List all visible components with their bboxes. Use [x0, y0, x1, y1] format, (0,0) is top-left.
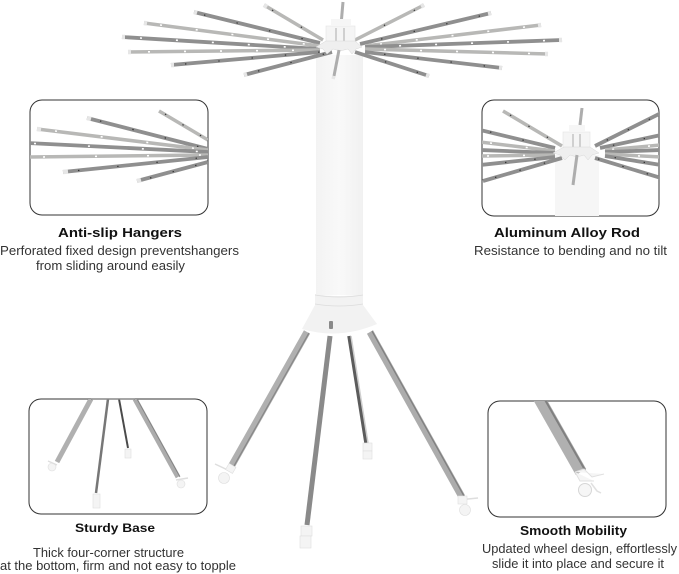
text: anti-slip description	[0, 243, 239, 273]
panel frame	[482, 100, 659, 216]
panel: anti-slip hangers	[28, 100, 208, 215]
right rods	[355, 5, 562, 76]
wheel close-up	[539, 398, 604, 496]
heading: aluminum alloy rod: Aluminum Alloy Rod	[494, 225, 640, 240]
rod hub close-up	[480, 108, 661, 216]
panel frame	[29, 399, 207, 514]
heading: sturdy base: Sturdy Base	[75, 521, 155, 535]
column	[316, 55, 363, 295]
heading: smooth mobility: Smooth Mobility	[520, 523, 628, 538]
casters	[215, 443, 478, 548]
text: sturdy base description: at the bottom, firm and not easy to topple	[0, 558, 236, 573]
hanger rods close-up	[28, 111, 208, 181]
text: smooth mobility description: slide it into place and secure it	[492, 556, 664, 571]
base legs close-up	[48, 399, 188, 508]
panel: smooth mobility	[488, 398, 666, 517]
panel: sturdy base	[29, 399, 207, 514]
legs	[232, 331, 464, 525]
panel frame	[30, 100, 208, 215]
main product: hanger stand	[122, 2, 562, 548]
heading: anti-slip hangers: Anti-slip Hangers	[58, 225, 182, 240]
base collar and flare	[302, 294, 377, 333]
text: sturdy base description: Thick four-corner structure	[33, 545, 184, 560]
text: anti-slip description: Perforated fixed design preventshangers	[0, 243, 239, 258]
text: aluminum alloy description: Resistance to bending and no tilt	[474, 243, 667, 258]
panel: aluminum alloy rod	[480, 100, 661, 216]
left rods	[122, 5, 332, 75]
text: smooth mobility description: Updated wheel design, effortlessly	[482, 541, 677, 556]
panel frame	[488, 401, 666, 517]
hub	[316, 2, 362, 79]
text: anti-slip description: from sliding around easily	[36, 258, 186, 273]
text: sturdy base description	[0, 545, 236, 573]
text: smooth mobility description	[482, 541, 677, 571]
